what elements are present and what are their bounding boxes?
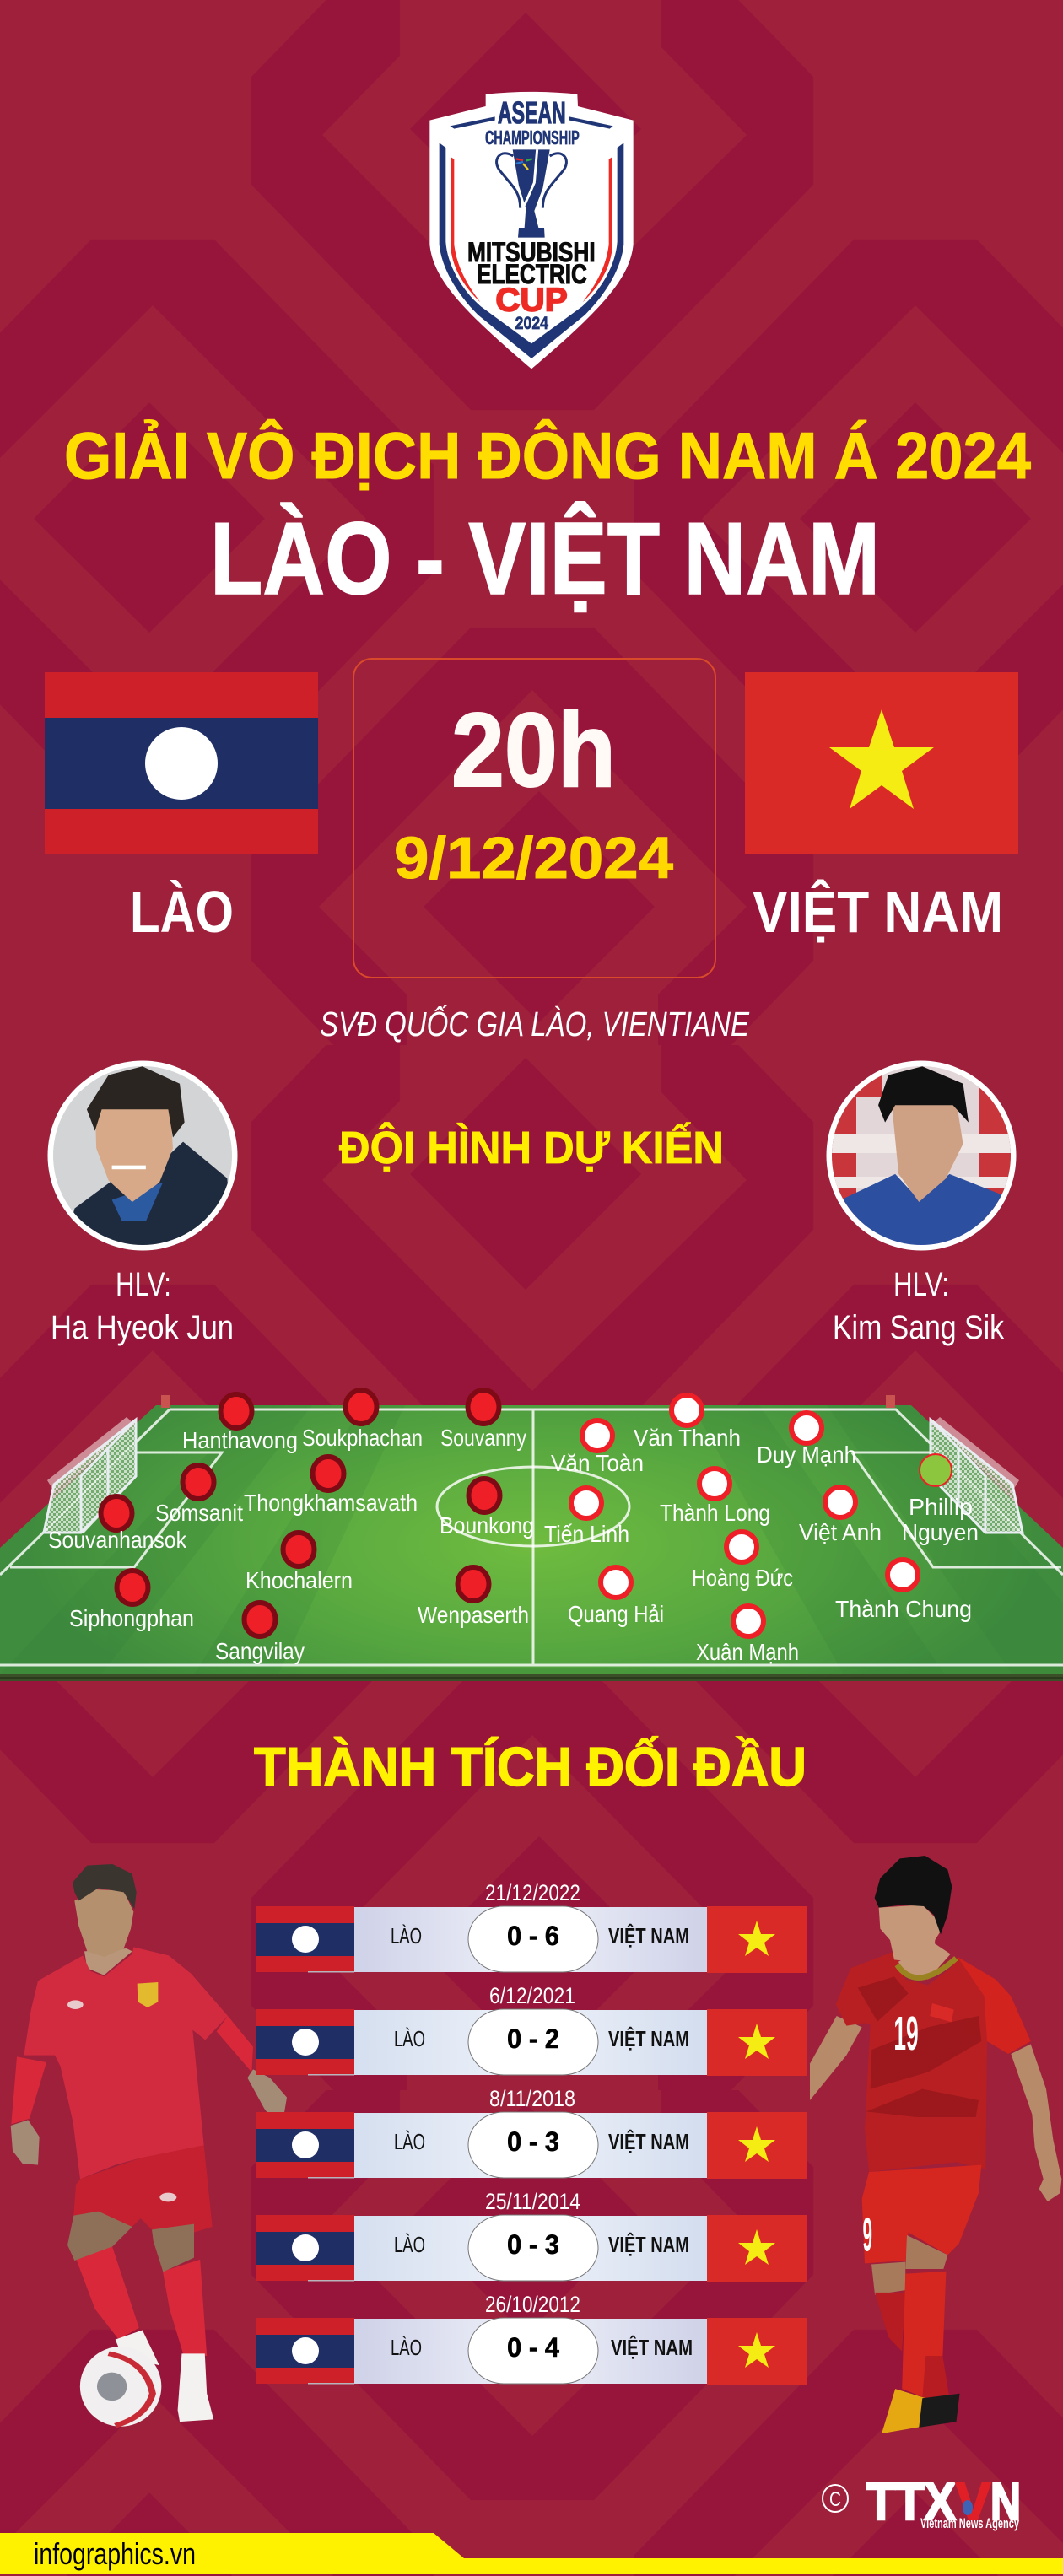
- Laos player names: Thongkhamsavath: [244, 1490, 418, 1516]
- copyright mark and TTXVN logo: V: [956, 2473, 990, 2531]
- Laos player names: Wenpaserth: [418, 1602, 529, 1628]
- football pitch with line-ups: [0, 1390, 1063, 1681]
- goal: right: [931, 1417, 1023, 1533]
- copyright mark and TTXVN logo: [823, 2473, 1021, 2531]
- coach photo: Ha Hyeok Jun: [47, 1061, 238, 1260]
- logo: ASEAN Championship Mitsubishi Electric Cup 2024: 2024: [515, 313, 548, 333]
- logo: ASEAN Championship Mitsubishi Electric Cup 2024: ELECTRIC: [477, 259, 587, 289]
- coach name: Laos: [51, 1266, 234, 1346]
- footer band: [0, 2533, 1063, 2574]
- Vietnam player names: Việt Anh: [799, 1519, 882, 1545]
- result row: 8/11/2018: VIỆT NAM: [608, 2129, 689, 2154]
- result row: 6/12/2021: 0 - 2: [507, 2024, 559, 2054]
- coach name: Vietnam: [833, 1266, 1005, 1346]
- result row: 8/11/2018: 8/11/2018: [489, 2086, 575, 2111]
- Laos player names: Sangvilay: [215, 1638, 305, 1664]
- result row: 8/11/2018: LÀO: [394, 2129, 425, 2154]
- Laos player names: [48, 1425, 534, 1664]
- result row: 6/12/2021: LÀO: [394, 2026, 425, 2051]
- match date: 9/12/2024: [394, 825, 673, 891]
- Vietnam player names: Hoàng Đức: [692, 1565, 793, 1591]
- corner flags: [161, 1395, 895, 1408]
- result row: 26/10/2012: 0 - 4: [507, 2332, 559, 2363]
- coach name: Vietnam: Kim Sang Sik: [833, 1309, 1005, 1346]
- section heading: head-to-head record: THÀNH TÍCH ĐỐI ĐẦU: [254, 1736, 807, 1797]
- logo: ASEAN Championship Mitsubishi Electric Cup 2024: MITSUBISHI: [467, 236, 596, 267]
- result row: 25/11/2014: 0 - 3: [507, 2229, 559, 2260]
- goal: left: [44, 1417, 136, 1533]
- result row: 6/12/2021: 6/12/2021: [489, 1983, 575, 2008]
- Vietnam player names: Phillip: [909, 1494, 973, 1520]
- result row: 21/12/2022: 0 - 6: [507, 1921, 559, 1951]
- Laos player markers: [101, 1390, 499, 1636]
- kick-off time: 20h: [451, 693, 616, 809]
- result row: 6/12/2021: [256, 1983, 807, 2076]
- section heading: expected line-up: ĐỘI HÌNH DỰ KIẾN: [339, 1122, 724, 1173]
- title: match: LÀO - VIỆT NAM: [210, 501, 880, 616]
- result row: 26/10/2012: [256, 2292, 807, 2385]
- Vietnam player names: Thành Long: [660, 1500, 770, 1526]
- result row: 26/10/2012: VIỆT NAM: [611, 2335, 693, 2360]
- result row: 26/10/2012: LÀO: [391, 2335, 422, 2360]
- result row: 8/11/2018: 0 - 3: [507, 2126, 559, 2157]
- result row: 26/10/2012: 26/10/2012: [485, 2292, 580, 2317]
- logo: ASEAN Championship Mitsubishi Electric Cup 2024: CUP: [495, 282, 568, 318]
- Vietnam player names: Văn Thanh: [634, 1425, 741, 1451]
- copyright mark and TTXVN logo: N: [990, 2473, 1021, 2531]
- player photo: Vietnam: 9: [863, 2208, 872, 2261]
- panel: kick-off box: [353, 659, 715, 978]
- player photo: Laos: [11, 1864, 287, 2427]
- Vietnam player names: Duy Mạnh: [757, 1442, 856, 1468]
- Laos player names: Soukphachan: [302, 1425, 423, 1451]
- coach name: Laos: HLV:: [116, 1266, 171, 1303]
- Vietnam player markers: [571, 1395, 918, 1636]
- logo: ASEAN Championship Mitsubishi Electric Cup 2024: [429, 92, 634, 369]
- result row: 21/12/2022: [256, 1880, 807, 1973]
- coach name: Laos: Ha Hyeok Jun: [51, 1309, 234, 1346]
- player photo: Vietnam: [810, 1856, 1061, 2433]
- flag: Laos: [45, 672, 318, 854]
- flag: Vietnam: [745, 672, 1018, 854]
- Laos player names: Souvanny: [440, 1425, 526, 1451]
- venue: SVĐ QUỐC GIA LÀO, VIENTIANE: [320, 1005, 750, 1043]
- result row: 21/12/2022: LÀO: [391, 1923, 422, 1948]
- Vietnam player names: Thành Chung: [835, 1596, 972, 1622]
- copyright mark and TTXVN logo: TTX: [866, 2473, 956, 2531]
- website: infographics.vn: [34, 2536, 196, 2571]
- result row: 6/12/2021: VIỆT NAM: [608, 2026, 689, 2051]
- coach name: Vietnam: HLV:: [893, 1266, 949, 1303]
- Laos player names: Siphongphan: [69, 1605, 194, 1631]
- Vietnam player names: Văn Toàn: [551, 1450, 644, 1476]
- result row: 8/11/2018: [256, 2086, 807, 2179]
- Vietnam player names: [544, 1425, 979, 1665]
- result row: 25/11/2014: 25/11/2014: [485, 2189, 580, 2214]
- Laos player names: Khochalern: [246, 1567, 353, 1593]
- team name: Vietnam: VIỆT NAM: [753, 878, 1003, 945]
- Vietnam goalkeeper marker: [920, 1454, 952, 1486]
- Vietnam player names: Quang Hải: [568, 1601, 664, 1627]
- Laos player names: Hanthavong: [182, 1427, 298, 1453]
- player photo: Vietnam: 19: [893, 2007, 919, 2061]
- result row: 21/12/2022: 21/12/2022: [485, 1880, 580, 1905]
- copyright mark and TTXVN logo: C: [829, 2488, 841, 2511]
- result row: 21/12/2022: VIỆT NAM: [608, 1923, 689, 1948]
- Vietnam player names: Nguyen: [902, 1519, 979, 1545]
- result row: 25/11/2014: LÀO: [394, 2232, 425, 2257]
- Laos player names: Souvanhansok: [48, 1527, 187, 1553]
- team name: Laos: LÀO: [130, 879, 234, 945]
- coach photo: Kim Sang Sik: [827, 1061, 1016, 1260]
- result row: 25/11/2014: VIỆT NAM: [608, 2232, 689, 2257]
- logo: ASEAN Championship Mitsubishi Electric Cup 2024: ASEAN: [498, 95, 566, 130]
- result row: 25/11/2014: [256, 2189, 807, 2282]
- logo: ASEAN Championship Mitsubishi Electric Cup 2024: CHAMPIONSHIP: [485, 127, 580, 148]
- Vietnam player names: Tiến Linh: [544, 1521, 629, 1547]
- Vietnam player names: Xuân Mạnh: [696, 1639, 799, 1665]
- Laos player names: Somsanit: [155, 1500, 243, 1526]
- Laos player names: Bounkong: [440, 1512, 534, 1539]
